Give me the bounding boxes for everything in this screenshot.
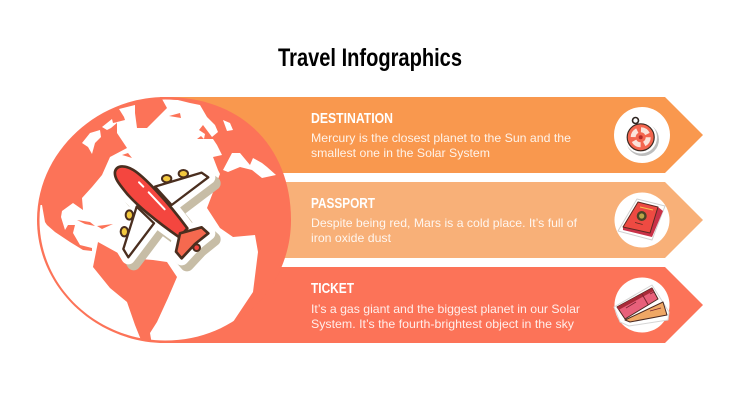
plane engines (121, 170, 188, 236)
text: passport description: Despite being red, Mars is a cold place. It’s full of (311, 216, 578, 230)
arrow: passport (160, 182, 703, 258)
text: ticket description: It’s a gas giant and the biggest planet in our Solar (311, 302, 580, 316)
text: ticket description (311, 302, 580, 331)
heading: passport: PASSPORT (311, 195, 375, 212)
icon: tickets (614, 278, 670, 332)
plane tail fin (193, 244, 200, 251)
text: passport description (311, 216, 578, 245)
plane fuselage (115, 166, 187, 237)
plane tail (176, 227, 208, 258)
plane wings (123, 173, 208, 257)
icon: compass (614, 107, 670, 163)
heading: destination: DESTINATION (311, 110, 393, 127)
text: destination description: smallest one in the Solar System (311, 146, 490, 160)
panel: destination (160, 97, 703, 173)
panel: passport (160, 182, 703, 258)
icon: passport (614, 192, 670, 248)
text: destination description (311, 131, 571, 160)
globe (20, 97, 291, 345)
arrow: destination (160, 97, 703, 173)
heading: ticket: TICKET (311, 280, 354, 297)
plane windows (139, 182, 165, 209)
arrow: ticket (160, 267, 703, 343)
plane sticker shadow (120, 172, 214, 264)
plane sticker border (115, 166, 208, 258)
title: Travel Infographics (278, 44, 462, 72)
icon: airplane (115, 166, 214, 264)
text: ticket description: System. It’s the fourth-brightest object in the sky (311, 317, 574, 331)
panel: ticket (160, 267, 703, 343)
text: passport description: iron oxide dust (311, 231, 392, 245)
text: destination description: Mercury is the closest planet to the Sun and the (311, 131, 571, 145)
